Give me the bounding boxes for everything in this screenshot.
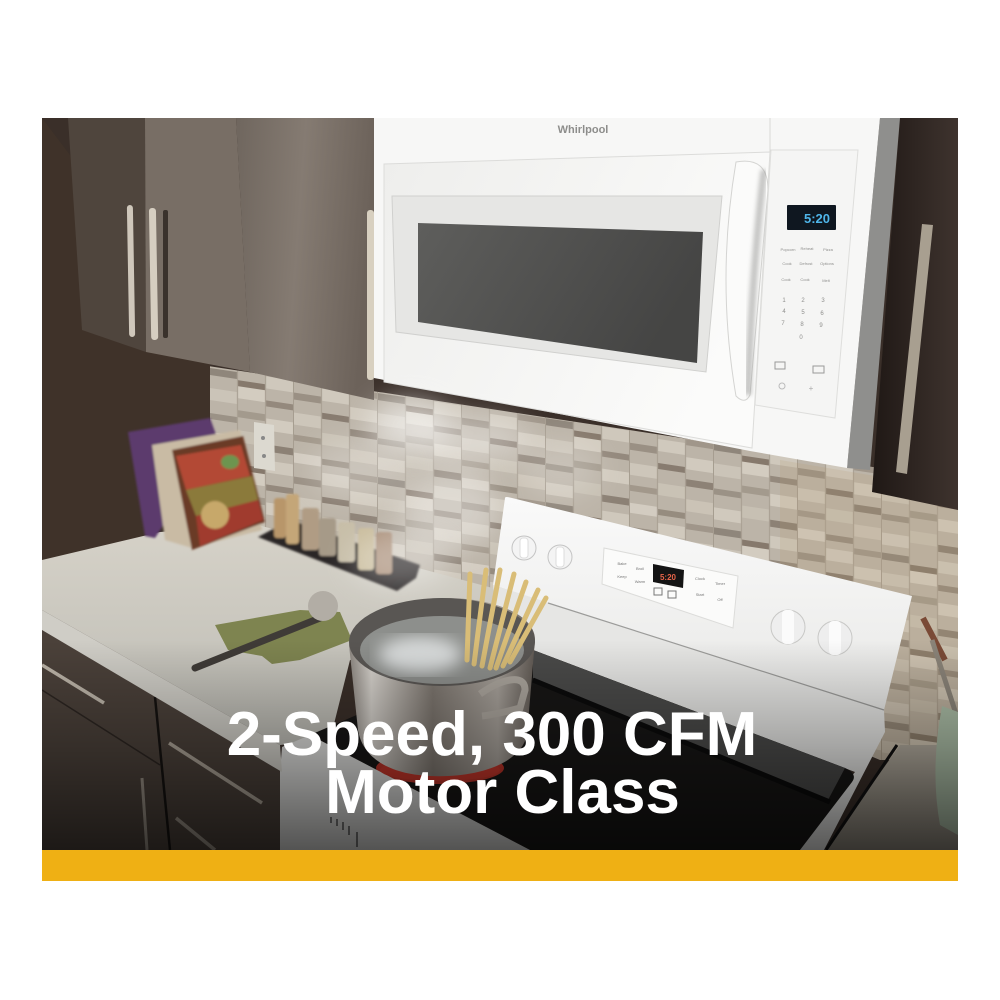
microwave: + bbox=[809, 384, 814, 393]
kitchen photo bbox=[42, 118, 958, 881]
keypad: 9 bbox=[819, 323, 823, 329]
keypad: 8 bbox=[800, 322, 804, 328]
books bbox=[128, 418, 265, 550]
keypad: 6 bbox=[820, 311, 824, 317]
keypad: 7 bbox=[781, 321, 785, 327]
backsplash tiles bbox=[208, 366, 958, 760]
range front bbox=[280, 735, 530, 850]
keypad: Cook bbox=[782, 261, 792, 266]
lower cabinets bbox=[42, 630, 280, 850]
range backguard: 5:20 bbox=[660, 573, 677, 582]
microwave: 5:20 bbox=[804, 211, 830, 226]
infographic bbox=[42, 118, 958, 881]
keypad: Melt bbox=[822, 278, 831, 283]
keypad: Cook bbox=[800, 277, 810, 282]
countertop bbox=[42, 525, 500, 745]
wall outlet bbox=[254, 422, 275, 471]
keypad: Options bbox=[820, 261, 834, 266]
range backguard: Start bbox=[696, 592, 705, 597]
brand logo: Whirlpool bbox=[558, 124, 608, 136]
caption: 2-Speed, 300 CFM bbox=[227, 700, 757, 769]
microwave window bbox=[418, 223, 703, 363]
range backguard: Timer bbox=[715, 581, 726, 586]
display bbox=[787, 205, 836, 230]
control panel bbox=[755, 150, 858, 418]
caption: Motor Class bbox=[325, 758, 680, 827]
keypad: 2 bbox=[801, 298, 805, 304]
keypad: Popcorn bbox=[781, 247, 795, 252]
range backguard bbox=[493, 497, 912, 850]
yellow bar bbox=[42, 850, 958, 881]
range backguard: Broil bbox=[636, 566, 644, 571]
range gap to counter bbox=[826, 745, 897, 850]
caption bbox=[227, 700, 757, 827]
keypad: 3 bbox=[821, 298, 825, 304]
keypad: Reheat bbox=[801, 246, 814, 251]
left wall shadow bbox=[208, 366, 210, 422]
burner glow bbox=[381, 772, 388, 776]
pasta bbox=[467, 570, 546, 668]
microwave bbox=[367, 118, 900, 470]
keypad bbox=[781, 246, 834, 341]
range backguard: Clock bbox=[695, 576, 705, 581]
cooktop bbox=[310, 645, 854, 850]
handle shadow bbox=[748, 170, 764, 395]
range display bbox=[653, 564, 684, 588]
spice jars tray bbox=[258, 494, 420, 591]
keypad: 5 bbox=[801, 310, 805, 316]
range backguard: Keep bbox=[617, 574, 627, 579]
utensil crock bbox=[923, 618, 958, 835]
keypad: 4 bbox=[782, 309, 786, 315]
knobs bbox=[512, 536, 536, 560]
warm tone on right tiles bbox=[780, 460, 958, 760]
green towel and ladle bbox=[195, 591, 352, 668]
range backguard: Warm bbox=[635, 579, 646, 584]
keypad: 1 bbox=[782, 298, 786, 304]
keypad: Pizza bbox=[823, 247, 834, 252]
right dark cabinet bbox=[872, 118, 958, 510]
pot bbox=[349, 598, 535, 776]
keypad: 0 bbox=[799, 335, 803, 341]
microwave handle bbox=[726, 161, 768, 400]
range backguard: Bake bbox=[617, 561, 627, 566]
range backguard: Off bbox=[717, 597, 724, 602]
counter edge bbox=[42, 610, 282, 772]
keypad: Cook bbox=[781, 277, 791, 282]
left handle bbox=[367, 210, 374, 380]
steam bbox=[310, 399, 600, 588]
upper cabinets bbox=[68, 118, 374, 400]
keypad: Defrost bbox=[800, 261, 813, 266]
bottom shade bbox=[42, 640, 958, 851]
range front band bbox=[493, 585, 885, 850]
